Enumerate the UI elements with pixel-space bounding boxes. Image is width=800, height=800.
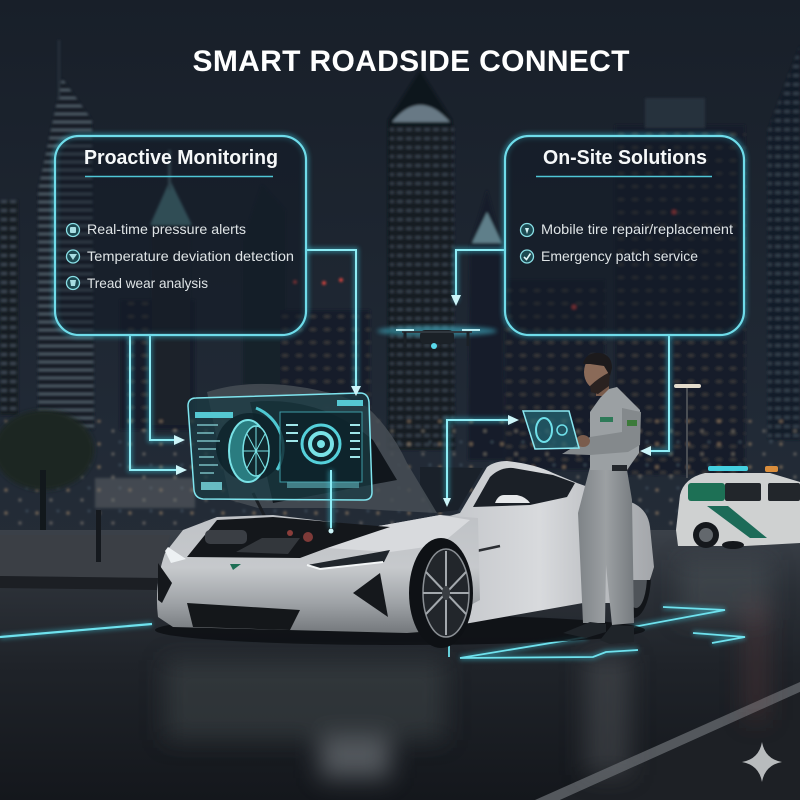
panel frame xyxy=(505,136,744,335)
engine parts xyxy=(205,530,313,554)
connector: car to tablet xyxy=(447,420,512,500)
face xyxy=(584,355,610,389)
service van xyxy=(676,466,800,549)
windshield xyxy=(420,467,483,513)
connector: display to engine xyxy=(330,470,332,528)
hologram frame xyxy=(188,393,372,500)
neck xyxy=(596,382,609,396)
panel: on-site solutions xyxy=(505,136,744,335)
front wheel xyxy=(409,538,473,648)
shoes xyxy=(563,622,606,638)
hood dark inside xyxy=(250,401,397,503)
car rear body xyxy=(400,461,654,630)
panel frame xyxy=(55,136,306,335)
item: mobile tire repair: Mobile tire repair/replacement xyxy=(541,221,733,237)
left headlight xyxy=(165,547,186,563)
icon: sparkle watermark xyxy=(742,742,782,782)
connector: monitoring to display upper xyxy=(150,335,178,440)
headlight strip xyxy=(307,562,383,569)
floor light lines xyxy=(0,607,745,658)
belt xyxy=(612,465,627,471)
sports car xyxy=(155,384,654,648)
car front body xyxy=(157,515,480,633)
sidewalk xyxy=(0,535,170,578)
hood strut xyxy=(253,493,265,517)
tree xyxy=(0,410,94,530)
wing mirror xyxy=(495,495,530,503)
arm xyxy=(562,408,641,455)
engine hologram display xyxy=(188,393,372,500)
side windows xyxy=(473,468,575,507)
handheld tablet hologram xyxy=(523,411,579,449)
item: tread wear analysis: Tread wear analysis xyxy=(87,275,208,291)
heading divider xyxy=(536,176,712,178)
item: emergency patch service: Emergency patch service xyxy=(541,248,698,264)
heading divider xyxy=(85,176,273,178)
connector: monitoring to display top xyxy=(306,250,356,390)
title: SMART ROADSIDE CONNECT xyxy=(192,45,630,78)
ground reflections xyxy=(165,560,770,778)
rear wheel xyxy=(615,532,651,618)
technician xyxy=(562,353,641,644)
front air intakes xyxy=(158,563,172,603)
sidewalk kerb xyxy=(0,576,158,590)
panel heading: On-Site Solutions xyxy=(543,147,707,169)
connector lines xyxy=(130,250,669,528)
hologram tire icon xyxy=(216,408,284,482)
front fender highlight xyxy=(327,515,470,552)
hologram sidebar data xyxy=(195,400,363,490)
connector glow layer xyxy=(130,250,669,528)
connector arrowheads xyxy=(174,295,651,534)
legs xyxy=(578,467,634,625)
wet ground xyxy=(0,530,800,800)
item: temperature deviation detection: Temperature deviation detection xyxy=(87,248,294,264)
torso xyxy=(590,387,640,470)
panel heading: Proactive Monitoring xyxy=(84,147,278,169)
open hood xyxy=(207,384,437,513)
connector: solutions to technician xyxy=(648,335,669,451)
road curb xyxy=(535,682,800,800)
pavement corner xyxy=(560,692,800,800)
beard xyxy=(590,372,610,394)
hologram gauge panel xyxy=(280,412,362,488)
panel glow xyxy=(55,136,306,335)
panel: proactive monitoring xyxy=(55,136,306,335)
engine bay xyxy=(187,517,390,558)
panel glow xyxy=(505,136,744,335)
right headlight xyxy=(307,550,390,569)
item: real-time pressure alerts: Real-time pressure alerts xyxy=(87,221,246,237)
bollard xyxy=(96,510,101,562)
door trim xyxy=(472,546,500,552)
floor light glow xyxy=(0,607,745,658)
car shadow xyxy=(155,615,645,645)
connector: monitoring to display lower xyxy=(130,335,180,470)
badge xyxy=(230,564,241,570)
connector: solutions to drone xyxy=(456,250,505,302)
name badge xyxy=(600,417,613,422)
street lamp xyxy=(674,384,701,478)
shoulder patch xyxy=(627,420,637,426)
hand xyxy=(576,435,590,447)
hair xyxy=(583,353,612,376)
delivery drone xyxy=(377,326,497,349)
city skyline xyxy=(0,40,800,530)
